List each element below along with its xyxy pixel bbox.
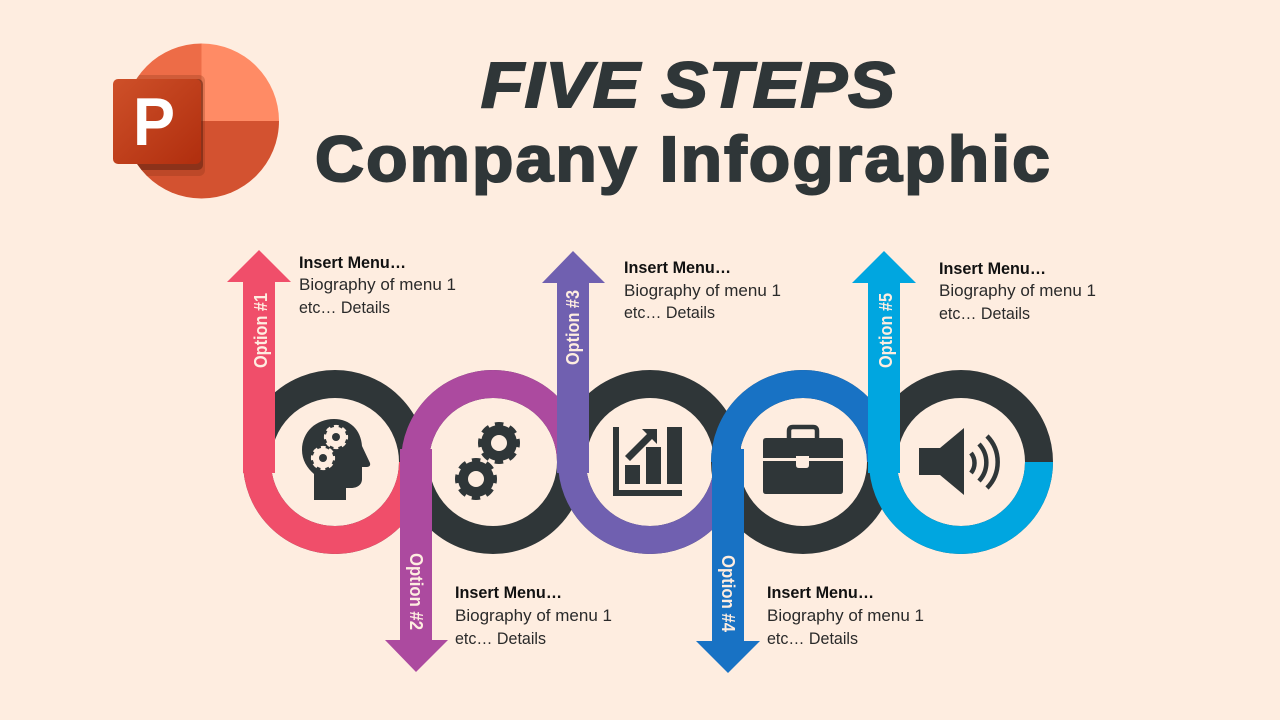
text block: menu 4: etc… Details — [767, 629, 858, 648]
label: option 2: Option #2 — [406, 553, 426, 630]
text block: menu 4: Insert Menu… — [767, 583, 874, 602]
text block: menu 3: Biography of menu 1 — [624, 281, 781, 300]
title: five steps: FIVE STEPS — [481, 49, 896, 121]
text block: menu 5 — [939, 259, 1096, 323]
icon: rising bar chart — [613, 427, 682, 496]
text block: menu 1: Biography of menu 1 — [299, 275, 456, 294]
text block: menu 2 — [455, 583, 612, 648]
title: company infographic: Company Infographic — [315, 123, 1052, 195]
dark rings behind the ribbon — [257, 384, 1039, 540]
text block: menu 4 — [767, 583, 924, 648]
text block: menu 5: etc… Details — [939, 304, 1030, 323]
text block: menu 5: Insert Menu… — [939, 259, 1046, 278]
text block: menu 1 — [299, 253, 456, 317]
label: option 1: Option #1 — [251, 293, 271, 368]
text block: menu 1: Insert Menu… — [299, 253, 406, 272]
text block: menu 2: etc… Details — [455, 629, 546, 648]
arrow: option 3 ribbon — [542, 251, 728, 540]
arrow: option 5 ribbon — [852, 251, 1039, 540]
icon: PowerPoint logo: P — [133, 84, 175, 160]
text block: menu 3 — [624, 258, 781, 322]
icon: two gears — [457, 424, 518, 498]
icon: head with gears — [302, 419, 370, 500]
text block: menu 5: Biography of menu 1 — [939, 281, 1096, 300]
arrow: option 2 ribbon — [385, 384, 571, 672]
text block: menu 4: Biography of menu 1 — [767, 606, 924, 625]
label: option 5: Option #5 — [876, 293, 896, 368]
icon: speaker — [919, 428, 998, 495]
text block: menu 3: Insert Menu… — [624, 258, 731, 277]
icon: PowerPoint logo — [113, 44, 279, 198]
label: option 3: Option #3 — [563, 290, 583, 365]
text block: menu 2: Biography of menu 1 — [455, 606, 612, 625]
text block: menu 1: etc… Details — [299, 298, 390, 317]
text block: menu 3: etc… Details — [624, 303, 715, 322]
text block: menu 2: Insert Menu… — [455, 583, 562, 602]
label: option 4: Option #4 — [718, 555, 738, 632]
arrow: option 4 ribbon — [696, 384, 881, 673]
icon: briefcase — [763, 427, 843, 494]
arrow: option 1 ribbon — [227, 250, 413, 540]
